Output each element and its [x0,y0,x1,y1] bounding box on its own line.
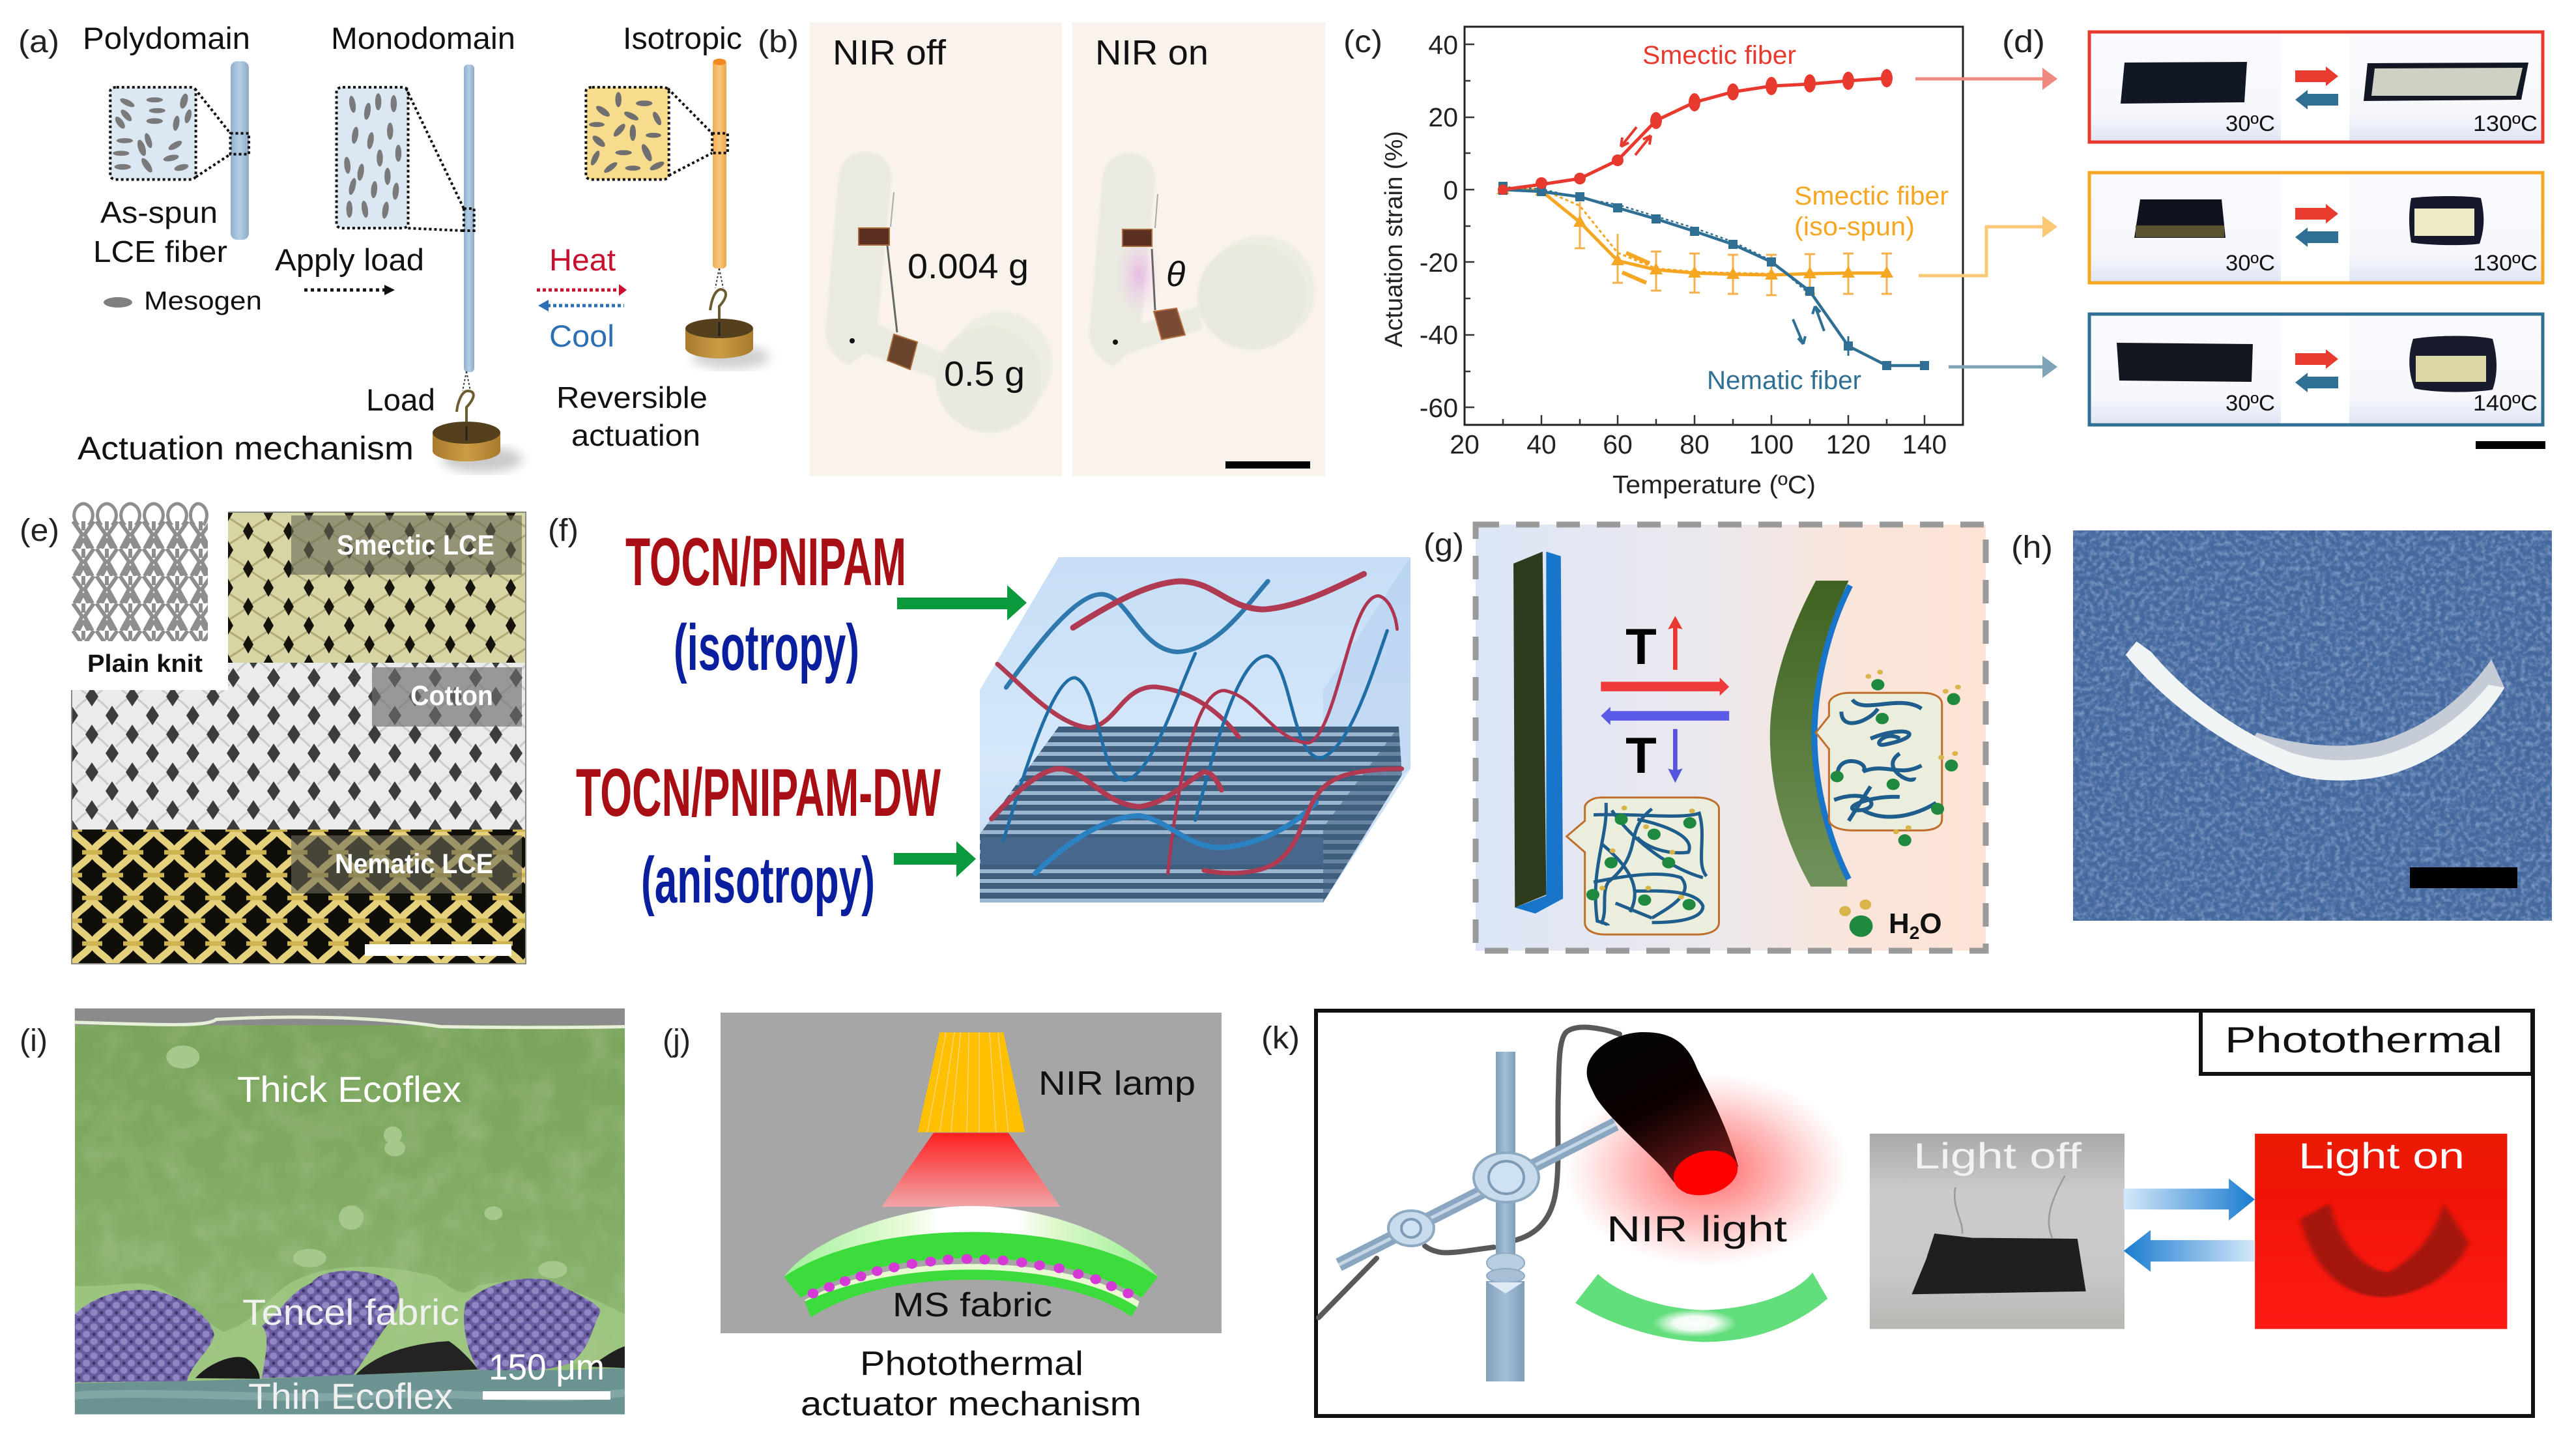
label: Smectic LCE: Smectic LCE [337,530,494,561]
text: Reversible actuation: actuation [571,418,700,452]
text: scale label: 150 μm [489,1346,605,1387]
y axis tick labels: -60 [1420,393,1458,423]
label (a): (a) [18,25,59,59]
y axis tick labels: -40 [1420,320,1458,350]
text: Thick Ecoflex: Thick Ecoflex [237,1069,461,1110]
photo: NIR on [1072,22,1325,476]
series label: Smectic fiber (iso-spun): Smectic fiber [1794,182,1949,210]
panel: (e) knit fabric [20,504,526,964]
text: T down: T [1625,727,1657,784]
arrow: reverse blue [1601,707,1729,725]
panel: (j) photothermal actuator mechanism [663,1013,1222,1423]
SEM image [75,1009,625,1414]
row: nematic fiber photos: 30ºC [2225,391,2275,416]
panel: (c) actuation strain chart [1343,25,2057,499]
straight bilayer strip [1513,552,1563,914]
x axis tick labels [1450,429,1947,459]
label: Cotton: Cotton [410,680,493,712]
legend: H2O: O [1919,908,1942,940]
x axis tick labels: 40 [1526,429,1556,459]
text: Light on: Light on [2298,1135,2465,1176]
text: Reversible actuation [556,381,708,452]
NIR lamp [918,1032,1025,1133]
label (f): (f) [548,513,579,548]
series label: Smectic fiber (iso-spun) [1794,182,1949,241]
text: As-spun LCE fiber [93,195,227,268]
label (c): (c) [1343,25,1382,59]
icon: hanging weight 1 [433,371,522,472]
photo: NIR off: 0.5 g [944,354,1025,394]
arrow: smectic to d [1915,68,2057,90]
row: iso-spun fiber photos [2089,173,2543,283]
x axis tick labels: 140 [1902,429,1947,459]
x axis tick labels: 60 [1603,429,1633,459]
box: Photothermal title: Photothermal [2225,1019,2502,1060]
caption: Photothermal actuator mechanism: Photothermal [860,1345,1083,1383]
label (d): (d) [2002,25,2045,59]
text: Thin Ecoflex: Thin Ecoflex [248,1376,453,1417]
photo: NIR off: NIR off [833,33,947,72]
heading: Monodomain: Monodomain [331,21,515,55]
label: Smectic LCE [291,515,522,575]
label: Nematic LCE: Nematic LCE [335,848,493,880]
label (e): (e) [20,513,59,548]
y axis tick labels: 40 [1428,30,1458,60]
arrow: iso-spun to d [1919,216,2057,276]
text: Actuation mechanism: Actuation mechanism [78,430,414,467]
legend: H2O: H [1889,908,1910,940]
arrow: nematic to d [1949,356,2057,378]
photo: Light off [1870,1134,2125,1329]
label (b): (b) [758,25,799,59]
arrow: apply load [304,285,395,295]
panel: (k) photothermal demonstration [1261,1011,2533,1416]
arrow: forward red [1601,678,1729,696]
isotropic fiber with inset [586,59,728,268]
caption: Photothermal actuator mechanism [801,1345,1141,1423]
photo: Light on [2255,1134,2507,1329]
text: As-spun LCE fiber: LCE fiber [93,235,227,268]
cable [1319,1027,1620,1318]
panel: (a) actuation mechanism [18,21,770,472]
label (i): (i) [20,1024,48,1058]
NIR lamp head [1587,1032,1742,1202]
scale bar [2476,441,2545,449]
photo: smectic LCE knit [228,512,526,671]
polydomain fiber with inset [110,61,249,240]
arrow: cool [538,300,624,311]
photo: NIR on: θ [1166,255,1185,294]
label (g): (g) [1424,528,1464,562]
series label: Smectic fiber: Smectic fiber [1642,41,1796,70]
row: iso-spun fiber photos: 30ºC [2225,251,2275,276]
row: iso-spun fiber photos: 130ºC [2473,251,2538,276]
box: Photothermal title [2201,1011,2532,1074]
photo: cotton knit [72,663,526,837]
text: Load: Load [366,383,435,417]
label: Nematic LCE [291,835,522,893]
callout: swollen network [1567,798,1719,934]
heading: Polydomain: Polydomain [83,21,250,55]
label: Cotton [372,667,522,727]
arrow: isotropy layer [897,585,1027,620]
row: nematic fiber photos: 140ºC [2473,391,2538,416]
bent fabric [1575,1273,1827,1342]
text: TOCN/PNIPAM-DW: TOCN/PNIPAM-DW [576,755,941,831]
inset: plain knit schematic [72,504,208,641]
arrow: temperature down [1668,729,1683,783]
lab stand [1339,1052,1616,1381]
image frame [72,512,526,964]
photo: nematic LCE knit [72,830,526,964]
row: smectic fiber photos [2089,32,2543,142]
series: orange iso-spun smectic [1496,182,1893,295]
text: (anisotropy): (anisotropy) [641,844,875,917]
curved bent strip [1770,581,1850,887]
series label: Smectic fiber (iso-spun): (iso-spun) [1794,212,1915,241]
photo: blue fabric with white strip [2073,530,2552,921]
text: Apply load: Apply load [275,242,424,277]
x axis tick labels: 100 [1749,429,1794,459]
text: Tencel fabric: Tencel fabric [242,1292,459,1333]
x axis tick labels: 80 [1680,429,1710,459]
legend: mesogen [104,287,262,315]
light beam [881,1133,1061,1207]
panel: (h) curved strip photo [2011,530,2552,921]
heading: Isotropic: Isotropic [623,21,742,55]
arrow: heat [537,284,627,296]
x axis title: Temperature (ºC) [1612,471,1816,499]
row: nematic fiber photos [2089,314,2543,425]
text: NIR lamp: NIR lamp [1038,1065,1195,1103]
MS fabric [784,1206,1158,1318]
text: (isotropy): (isotropy) [674,611,859,684]
callout: collapsed network [1816,670,1961,846]
legend: H2O: 2 [1910,923,1919,943]
panel: (i) SEM cross-section [20,1009,625,1417]
text: TOCN/PNIPAM: TOCN/PNIPAM [625,525,906,600]
arrow: to light on [2124,1179,2255,1220]
label (h): (h) [2011,530,2053,565]
label: Cool: Cool [549,319,614,353]
series: red smectic [1498,69,1893,195]
caption: Photothermal actuator mechanism: actuator mechanism [801,1385,1141,1423]
scale bar [365,944,511,956]
panel: (b) NIR photos [758,22,1325,476]
arrow: temperature up [1668,616,1683,670]
frame [1316,1011,2533,1416]
y axis tick labels: 0 [1443,175,1458,205]
text: T up: T [1625,618,1657,675]
y axis title: Actuation strain (%) [1381,131,1408,347]
glow: NIR [1564,1072,1850,1267]
label: Heat: Heat [549,242,616,277]
arrow: to light off [2124,1230,2255,1272]
chart: axes [1465,27,1963,425]
series label: Nematic fiber: Nematic fiber [1707,366,1861,395]
series: blue nematic [1498,182,1929,370]
3D block with layers and chains [980,557,1410,903]
x axis tick labels: 120 [1826,429,1870,459]
text: As-spun LCE fiber: As-spun [100,195,218,229]
y axis tick labels: 20 [1428,102,1458,132]
photo: NIR off: 0.004 g [908,247,1029,286]
y axis tick labels [1420,30,1458,423]
icon: hanging weight 2 [685,268,770,369]
arrow: anisotropy layer [894,841,976,877]
row: smectic fiber photos: 130ºC [2473,111,2538,136]
x axis tick labels: 20 [1450,429,1480,459]
text: NIR light: NIR light [1607,1208,1788,1249]
row: smectic fiber photos: 30ºC [2225,111,2275,136]
label (j): (j) [663,1024,691,1058]
panel: (d) fiber photos [2002,25,2545,449]
legend: water molecule spheres [1839,899,1873,937]
monodomain fiber with inset [337,65,474,372]
label: Plain knit: Plain knit [87,650,203,678]
text: Light off: Light off [1913,1135,2082,1176]
legend: mesogen: Mesogen [144,287,262,315]
photo: NIR off [810,22,1062,476]
panel: (f) hydrogel structure [548,513,1410,917]
panel: (g) thermo-responsive actuator [1424,525,1986,951]
text: MS fabric: MS fabric [893,1286,1052,1324]
text: Reversible actuation: Reversible [556,381,708,414]
photo: NIR on: NIR on [1095,33,1209,72]
gray background [721,1013,1222,1333]
label (k): (k) [1261,1021,1300,1056]
scale bar [483,1391,610,1400]
y axis tick labels: -20 [1420,248,1458,278]
dashed frame [1476,525,1986,951]
